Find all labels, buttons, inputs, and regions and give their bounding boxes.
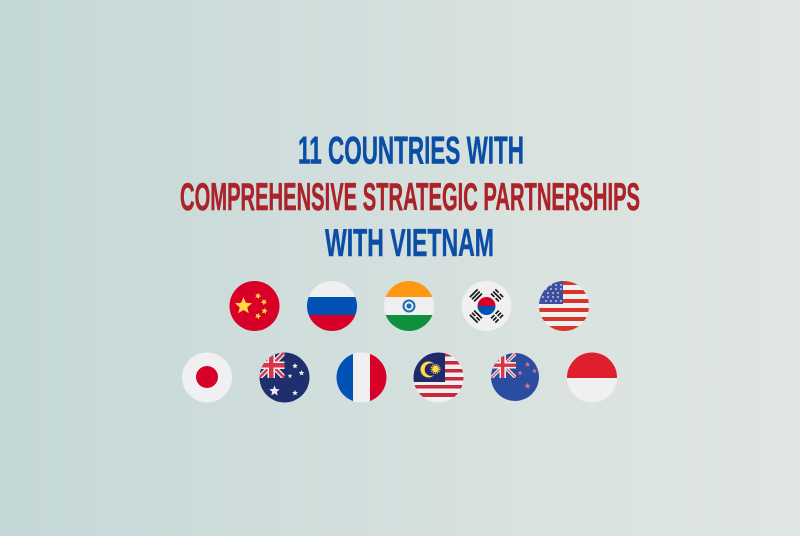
icon: flag of France (336, 352, 387, 403)
icon: flag of China (229, 281, 280, 331)
icon: flag of South Korea (461, 281, 512, 331)
title line 3: WITH VIETNAM (325, 222, 494, 265)
icon: flag of Russia (307, 281, 357, 331)
title line 1: 11 COUNTRIES WITH (298, 130, 524, 172)
icon: flag of Indonesia (567, 352, 617, 403)
icon: flag of the United States (539, 281, 589, 331)
title (180, 130, 640, 265)
icon: flag of India (384, 281, 434, 331)
icon: flag of Malaysia (413, 352, 464, 403)
icon: flag of Japan (182, 352, 232, 403)
icon: flag of New Zealand (491, 353, 539, 401)
icon: flag of Australia (259, 352, 310, 403)
